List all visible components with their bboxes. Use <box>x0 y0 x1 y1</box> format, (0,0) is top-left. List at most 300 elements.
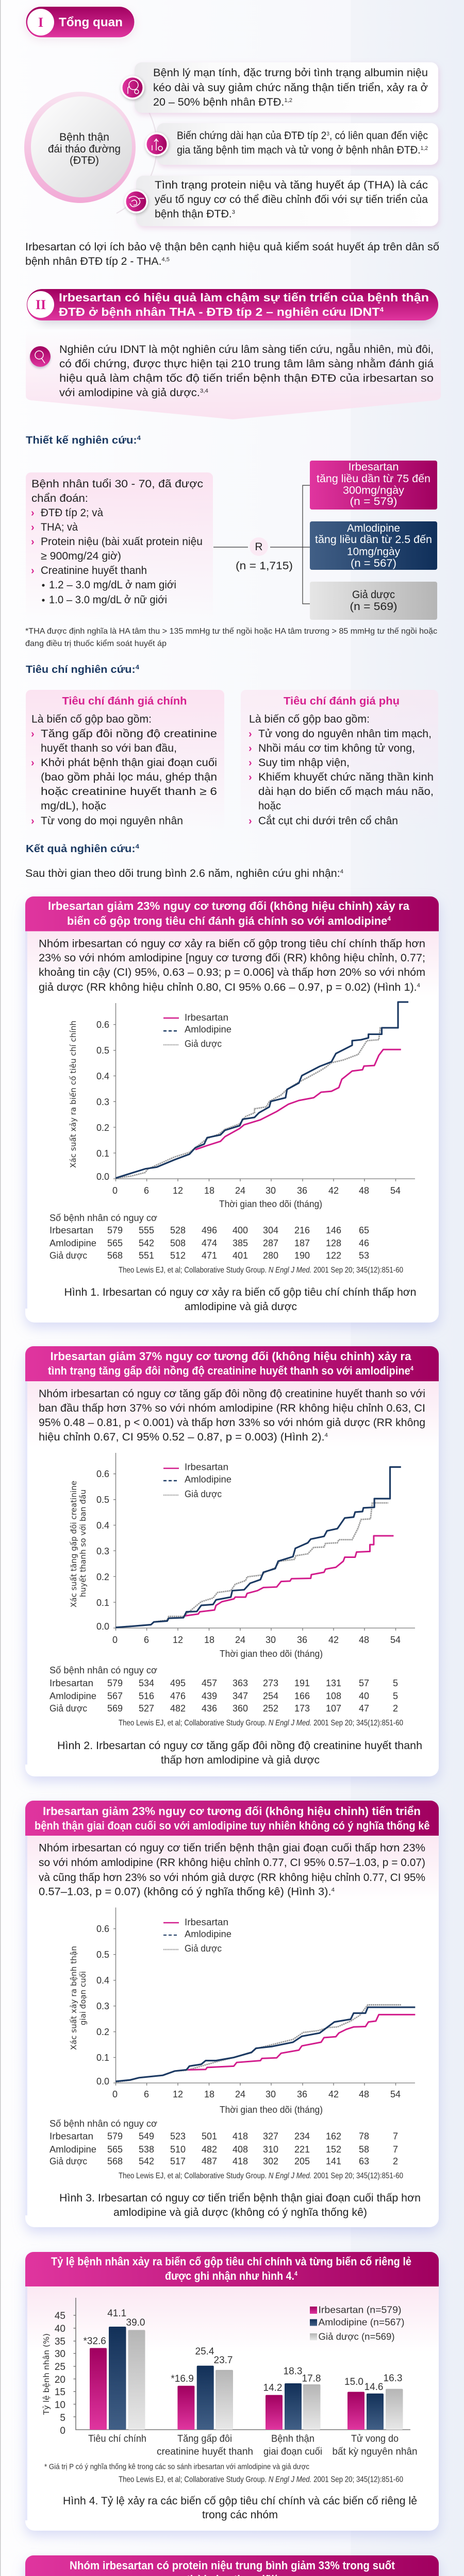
figure caption <box>64 1286 416 1313</box>
chart: end-stage renal disease: 54 <box>390 2089 401 2099</box>
risk table: Giả dược <box>49 1250 87 1261</box>
card 3: yếu tố nguy cơ có thể điều chỉnh đối với sự tiến triển của <box>155 194 428 206</box>
card 3 <box>136 176 438 226</box>
panel: IDNT description: hiệu quả làm chậm tốc độ tiến triển bệnh thận ĐTĐ của irbesartan so <box>59 372 434 384</box>
risk table: 487 <box>202 2156 217 2166</box>
panel: primary endpoint: (bao gồm phải lọc máu, ghép thận <box>41 771 217 783</box>
chart: doubling of serum creatinine: huyết thanh so với ban đầu <box>78 1489 88 1597</box>
chart: doubling of serum creatinine: 12 <box>173 1635 183 1645</box>
chart: doubling of serum creatinine: 24 <box>235 1635 245 1645</box>
legend <box>310 2305 404 2342</box>
risk table: 347 <box>233 1691 248 1701</box>
arm: amlodipine: 10mg/ngày <box>347 546 400 557</box>
group: doubling creatinine <box>157 2346 253 2458</box>
legend <box>163 1012 231 1049</box>
chart: doubling of serum creatinine: 0.0 <box>96 1621 109 1632</box>
risk table: Amlodipine <box>49 1238 96 1248</box>
chart: cumulative primary endpoint: 36 <box>297 1185 307 1196</box>
risk table: 205 <box>294 2156 310 2166</box>
panel: primary endpoint: Là biến cố gộp bao gồm: <box>31 713 152 725</box>
heading: study results: 4 <box>136 843 139 850</box>
risk table: Giả dược <box>49 2156 87 2166</box>
risk table <box>49 1213 369 1261</box>
panel: inclusion criteria: THA; và <box>41 521 78 533</box>
chart: end-stage renal disease: 42 <box>328 2089 339 2099</box>
panel: primary endpoint: Tiêu chí đánh giá chính <box>62 696 187 707</box>
chart: doubling of serum creatinine: 0.3 <box>96 1546 109 1556</box>
risk table: 78 <box>359 2131 369 2141</box>
panel: figure 5 proteinuria <box>25 2555 439 2576</box>
figure caption <box>57 1740 422 1766</box>
risk table: 517 <box>170 2156 186 2166</box>
chart: end-stage renal disease: 36 <box>297 2089 307 2099</box>
icon: kidney <box>124 190 148 213</box>
risk table: 310 <box>263 2144 278 2155</box>
bar chart: 20 <box>55 2375 65 2385</box>
risk table: 510 <box>170 2144 186 2155</box>
risk table: Amlodipine <box>49 1691 96 1701</box>
panel: primary endpoint: › <box>31 757 35 769</box>
panel: IDNT description: 3,4 <box>200 388 208 394</box>
card 3: bệnh thận ĐTĐ. <box>155 208 231 220</box>
chart: end-stage renal disease: 30 <box>266 2089 276 2099</box>
risk table: 46 <box>359 1238 369 1248</box>
risk table: 568 <box>107 1250 123 1261</box>
header: Tỷ lệ bệnh nhân xảy ra biến cố gộp tiêu chí chính và từng biến cố riêng lẻ <box>51 2255 411 2268</box>
risk table: 542 <box>139 1238 154 1248</box>
chart: cumulative primary endpoint: 0.0 <box>96 1172 109 1182</box>
chart: doubling of serum creatinine: 0 <box>112 1635 118 1645</box>
body text: 23% so với nhóm amlodipine [nguy cơ tương đối (RR) không hiệu chỉnh, 0.77; <box>39 952 425 964</box>
panel: primary endpoint: › <box>31 728 35 740</box>
panel: secondary endpoint: Nhồi máu cơ tim không tử vong, <box>258 742 415 754</box>
text: irbesartan renal benefit: 4,5 <box>162 257 170 263</box>
figure caption: Hình 2. Irbesartan có nguy cơ tăng gấp đôi nồng độ creatinine huyết thanh <box>57 1740 422 1752</box>
risk table: 363 <box>233 1678 248 1688</box>
body text: Nhóm irbesartan có nguy cơ xảy ra biến cố gộp trong tiêu chí chính thấp hơn <box>39 938 425 950</box>
panel: secondary endpoint: Khiếm khuyết chức năng thần kinh <box>258 771 434 783</box>
heading: section II <box>27 289 438 324</box>
risk table: 40 <box>359 1691 369 1701</box>
risk table: 47 <box>359 1703 369 1714</box>
risk table: 216 <box>294 1225 310 1235</box>
randomisation connector: R <box>255 541 263 553</box>
risk table: Số bệnh nhân có nguy cơ <box>49 1665 157 1675</box>
risk table: 128 <box>326 1238 341 1248</box>
chart: cumulative primary endpoint: 0.2 <box>96 1123 109 1133</box>
risk table: 191 <box>294 1678 310 1688</box>
randomisation connector: (n = 1,715) <box>236 560 293 572</box>
risk table: 166 <box>294 1691 310 1701</box>
legend: Giả dược <box>185 1039 222 1049</box>
citation: Theo Lewis EJ, et al; Collaborative Study Group. N Engl J Med. 2001 Sep 20; 345(12):851-60 <box>119 1266 403 1275</box>
arm: irbesartan <box>310 461 437 510</box>
chart: end-stage renal disease: 0 <box>112 2089 118 2099</box>
chart: cumulative primary endpoint: 0.3 <box>96 1097 109 1107</box>
risk table: 528 <box>170 1225 186 1235</box>
legend: Irbesartan <box>185 1462 228 1472</box>
chart: end-stage renal disease: 0.4 <box>96 1975 109 1986</box>
risk table: 527 <box>139 1703 154 1714</box>
arm: placebo: (n = 569) <box>350 601 397 613</box>
panel: secondary endpoint: Suy tim nhập viện, <box>258 757 350 769</box>
figure caption <box>63 2495 417 2521</box>
body text: khoảng tin cậy (CI) 95%, 0.63 – 0.93; p = 0.006] và thấp hơn 20% so với nhóm <box>39 967 425 978</box>
body text <box>39 1388 425 1443</box>
bar chart: 30 <box>55 2349 65 2360</box>
body text: 0.57–1.03, p = 0.07) (không có ý nghĩa thống kê) (Hình 3). <box>39 1886 318 1898</box>
chart: end-stage renal disease: 6 <box>144 2089 149 2099</box>
risk table: Amlodipine <box>49 2144 96 2155</box>
chart: cumulative primary endpoint: 6 <box>144 1185 149 1196</box>
heading: section II: II <box>36 297 46 312</box>
card 3: Tình trạng protein niệu và tăng huyết áp (THA) là các <box>155 179 428 191</box>
heading: section I <box>26 6 135 39</box>
panel: inclusion criteria: ĐTĐ típ 2; và <box>41 507 103 519</box>
header: 4 <box>410 1365 413 1372</box>
panel: figure 2 doubling of creatinine <box>25 1346 439 1776</box>
arm: irbesartan: (n = 579) <box>350 496 397 507</box>
chart: doubling of serum creatinine <box>69 1453 415 1659</box>
risk table: 146 <box>326 1225 341 1235</box>
panel: inclusion criteria: Creatinine huyết thanh <box>41 565 147 577</box>
legend: Irbesartan <box>185 1012 228 1023</box>
group: end-stage renal disease: 14.2 <box>263 2382 282 2394</box>
chart: cumulative primary endpoint: 0.6 <box>96 1020 109 1030</box>
risk table <box>49 2119 398 2166</box>
legend <box>163 1462 231 1499</box>
chart: doubling of serum creatinine: 0.2 <box>96 1572 109 1582</box>
group: end-stage renal disease: giai đoạn cuối <box>263 2446 322 2458</box>
legend: Irbesartan <box>185 1917 228 1927</box>
header <box>25 896 439 931</box>
chart: cumulative primary endpoint: 30 <box>266 1185 276 1196</box>
diagram: overview of diabetic kidney disease <box>24 62 438 226</box>
risk table: Số bệnh nhân có nguy cơ <box>49 1213 157 1223</box>
body text: so với nhóm amlodipine (RR không hiệu chỉnh 0.77, CI 95% 0.57–1.03, p = 0.07) <box>39 1857 425 1869</box>
chart: end-stage renal disease: 0.3 <box>96 2001 109 2011</box>
risk table: 565 <box>107 2144 123 2155</box>
central circle: Bệnh thận <box>59 131 109 143</box>
panel: secondary endpoint: hoặc <box>258 800 281 812</box>
chart: doubling of serum creatinine: 0.6 <box>96 1469 109 1479</box>
risk table: 152 <box>326 2144 341 2155</box>
central circle <box>24 92 136 203</box>
heading: study design: Thiết kế nghiên cứu: <box>26 435 127 446</box>
group: all-cause death <box>332 2373 418 2458</box>
chart: doubling of serum creatinine: Xác suất tăng gấp đôi creatinine <box>69 1481 78 1607</box>
risk table: 5 <box>393 1678 398 1688</box>
risk table: 327 <box>263 2131 278 2141</box>
panel: secondary endpoint: Là biến cố gộp bao gồm: <box>249 713 370 725</box>
risk table: 7 <box>393 2144 398 2155</box>
risk table: 63 <box>359 2156 369 2166</box>
bar chart: 5 <box>60 2413 65 2424</box>
bar chart: 15 <box>55 2387 65 2398</box>
risk table: 495 <box>170 1678 186 1688</box>
legend: Irbesartan (n=579) <box>319 2305 401 2315</box>
randomisation connector <box>213 485 310 604</box>
figure caption: Hình 4. Tỷ lệ xảy ra các biến cố gộp tiêu chí chính và các biến cố riêng lẻ <box>63 2495 417 2507</box>
group: primary endpoint: *32.6 <box>84 2336 106 2347</box>
chart: doubling of serum creatinine: 18 <box>204 1635 214 1645</box>
panel: primary endpoint: hoặc creatinine huyết thanh ≥ 6 <box>41 786 217 798</box>
panel: inclusion criteria <box>26 472 213 619</box>
card 1 <box>135 62 438 113</box>
text: follow-up: Sau thời gian theo dõi trung bình 2.6 năm, nghiên cứu ghi nhận: <box>25 868 333 879</box>
risk table: Giả dược <box>49 1703 87 1714</box>
chart: end-stage renal disease: 0.0 <box>96 2076 109 2087</box>
panel: inclusion criteria: › <box>31 507 35 519</box>
chart: doubling of serum creatinine: 42 <box>328 1635 339 1645</box>
card 2: , có liên quan đến việc <box>329 130 428 142</box>
risk table: 534 <box>139 1678 154 1688</box>
panel: secondary endpoint <box>241 690 438 831</box>
group: all-cause death: 16.3 <box>384 2373 402 2384</box>
chart: doubling of serum creatinine: 48 <box>359 1635 369 1645</box>
card 2: gia tăng bệnh tim mạch và tử vong ở bệnh nhân ĐTĐ. <box>177 144 436 156</box>
risk table: 436 <box>202 1703 217 1714</box>
body text: Nhóm irbesartan có nguy cơ tăng gấp đôi nồng độ creatinine huyết thanh so với <box>39 1388 425 1400</box>
chart: doubling of serum creatinine: 36 <box>297 1635 307 1645</box>
risk table: 551 <box>139 1250 154 1261</box>
header: Nhóm irbesartan có protein niệu trung bình giảm 33% trong suốt <box>70 2559 395 2572</box>
risk table: 408 <box>233 2144 248 2155</box>
heading: section II: Irbesartan có hiệu quả làm chậm sự tiến triển của bệnh thận <box>59 291 429 304</box>
heading: section I: I <box>38 15 43 30</box>
chart: doubling of serum creatinine: 0.5 <box>96 1495 109 1505</box>
chart: cumulative primary endpoint: 0.4 <box>96 1071 109 1081</box>
risk table: 273 <box>263 1678 278 1688</box>
panel: primary endpoint: Tăng gấp đôi nồng độ creatinine <box>41 728 217 740</box>
card 2: 1,2 <box>421 145 428 151</box>
risk table: 567 <box>107 1691 123 1701</box>
risk table: 58 <box>359 2144 369 2155</box>
risk table: 287 <box>263 1238 278 1248</box>
risk table <box>49 1665 398 1714</box>
citation: Theo Lewis EJ, et al; Collaborative Study Group. N Engl J Med. 2001 Sep 20; 345(12):851-60 <box>119 2475 403 2484</box>
heading: study criteria: Tiêu chí nghiên cứu: <box>26 664 127 675</box>
panel: IDNT description <box>26 330 441 419</box>
citation: Theo Lewis EJ, et al; Collaborative Study Group. N Engl J Med. 2001 Sep 20; 345(12):851-60 <box>119 2172 403 2180</box>
legend: Amlodipine <box>185 1475 231 1485</box>
chart: doubling of serum creatinine: 30 <box>266 1635 276 1645</box>
chart: cumulative primary endpoint <box>69 1002 415 1209</box>
panel: figure 3 end-stage renal disease <box>25 1801 439 2227</box>
group: doubling creatinine: 23.7 <box>214 2355 233 2366</box>
arm: irbesartan: 300mg/ngày <box>343 484 405 497</box>
group: end-stage renal disease <box>263 2366 322 2458</box>
card 2 <box>157 123 438 165</box>
body text: 95% 0.48 – 0.81, p < 0.001) và thấp hơn 33% so với nhóm giả dược (RR không <box>39 1417 425 1429</box>
body text <box>39 938 425 993</box>
body text: 4 <box>332 1887 335 1893</box>
risk table: 496 <box>202 1225 217 1235</box>
chart: doubling of serum creatinine: 6 <box>144 1635 149 1645</box>
group: all-cause death: bất kỳ nguyên nhân <box>332 2446 418 2458</box>
chart: end-stage renal disease: 0.2 <box>96 2027 109 2037</box>
risk table: Irbesartan <box>49 2131 93 2141</box>
risk table: 5 <box>393 1691 398 1701</box>
chart: end-stage renal disease: giai đoạn cuối <box>78 1971 88 2025</box>
risk table: 57 <box>359 1678 369 1688</box>
panel: secondary endpoint: › <box>248 816 252 827</box>
bar chart: 10 <box>55 2400 65 2411</box>
risk table: 508 <box>170 1238 186 1248</box>
panel: secondary endpoint: › <box>248 772 252 783</box>
group: doubling creatinine: Tăng gấp đôi <box>177 2434 232 2444</box>
legend: Giả dược <box>185 1943 222 1954</box>
body text: 4 <box>325 1432 328 1438</box>
group: primary endpoint: 39.0 <box>126 2317 145 2328</box>
risk table: 542 <box>139 2156 154 2166</box>
arm: amlodipine: (n = 567) <box>351 557 396 569</box>
panel: primary endpoint: Khởi phát bệnh thận giai đoạn cuối <box>41 757 217 769</box>
risk table: 400 <box>233 1225 248 1235</box>
risk table: 252 <box>263 1703 278 1714</box>
risk table: 569 <box>107 1703 123 1714</box>
risk table: Irbesartan <box>49 1678 93 1688</box>
panel: IDNT description: có đối chứng, được thực hiện tại 210 trung tâm lâm sàng nhằm đánh giá <box>59 358 434 370</box>
figure caption <box>59 2192 421 2218</box>
bar chart: 45 <box>55 2311 65 2321</box>
bar chart: 35 <box>55 2336 65 2347</box>
panel: primary endpoint <box>26 690 224 831</box>
risk table: 501 <box>202 2131 217 2141</box>
card 2: 3 <box>326 131 329 137</box>
arm: amlodipine: Amlodipine <box>347 522 400 534</box>
chart: cumulative primary endpoint: 0.1 <box>96 1148 109 1159</box>
central circle: đái tháo đường <box>48 143 121 155</box>
chart: cumulative primary endpoint: 54 <box>390 1185 401 1196</box>
risk table: 302 <box>263 2156 278 2166</box>
risk table: 474 <box>202 1238 217 1248</box>
figure caption: trong các nhóm <box>202 2509 278 2521</box>
panel: inclusion criteria: Protein niệu (bài xuất protein niệu <box>41 536 203 548</box>
heading: study results: Kết quả nghiên cứu: <box>26 843 126 855</box>
bar chart: Tỷ lệ bệnh nhân (%) <box>42 2333 51 2415</box>
header: Irbesartan giảm 37% nguy cơ tương đối (không hiệu chỉnh) xảy ra <box>51 1350 411 1363</box>
header: được ghi nhận như hình 4. <box>165 2269 310 2282</box>
arm: amlodipine: tăng liều dần từ 2.5 đến <box>315 534 432 546</box>
panel: inclusion criteria: › <box>31 565 35 577</box>
chart: end-stage renal disease: Thời gian theo dõi (tháng) <box>220 2105 323 2115</box>
icon: magnifier <box>30 346 51 367</box>
chart: doubling of serum creatinine: 54 <box>390 1635 401 1645</box>
text: irbesartan renal benefit: Irbesartan có lợi ích bảo vệ thận bên cạnh hiệu quả kiểm soát huyết áp trên dân số <box>25 241 439 253</box>
body text: ban đầu thấp hơn 37% so với nhóm amlodipine (RR không hiệu chỉnh 0.63, CI <box>39 1402 425 1414</box>
footnote: hypertension definition: *THA được định nghĩa là HA tâm thu > 135 mmHg tư thế ngồi hoặc HA tâm trương > 85 mmHg tư thế ngồi hoặc <box>25 627 437 636</box>
footnote: * Giá trị P có ý nghĩa thống kê trong các so sánh irbesartan với amlodipine và giả dược <box>44 2463 309 2471</box>
risk table: 108 <box>326 1691 341 1701</box>
legend <box>163 1917 231 1954</box>
panel: figure 1 primary composite <box>25 896 439 1323</box>
chart: end-stage renal disease: Xác suất xảy ra bệnh thận <box>69 1946 78 2050</box>
risk table: 2 <box>393 2156 398 2166</box>
text: irbesartan renal benefit: bệnh nhân ĐTĐ típ 2 - THA. <box>25 256 160 267</box>
risk table: 162 <box>326 2131 341 2141</box>
chart: cumulative primary endpoint: 0.5 <box>96 1045 109 1056</box>
arc connector <box>117 90 157 213</box>
risk table: 7 <box>393 2131 398 2141</box>
risk table: 568 <box>107 2156 123 2166</box>
risk table: 107 <box>326 1703 341 1714</box>
group: all-cause death: 14.6 <box>364 2382 383 2393</box>
risk table: 401 <box>233 1250 248 1261</box>
panel: inclusion criteria: › <box>31 522 35 533</box>
panel: figure 4 event rates <box>25 2252 439 2531</box>
panel: secondary endpoint: › <box>248 728 252 740</box>
panel: inclusion criteria: 1.0 – 3.0 mg/dL ở nữ giới <box>49 594 167 606</box>
arm: amlodipine <box>310 521 437 570</box>
panel: inclusion criteria: chẩn đoán: <box>31 493 88 504</box>
panel: secondary endpoint: › <box>248 757 252 769</box>
risk table: 131 <box>326 1678 341 1688</box>
chart: cumulative primary endpoint: Xác suất xảy ra biến cố tiêu chí chính <box>69 1021 78 1168</box>
risk table: 234 <box>294 2131 310 2141</box>
risk table: 2 <box>393 1703 398 1714</box>
risk table: 523 <box>170 2131 186 2141</box>
risk table: 65 <box>359 1225 369 1235</box>
header: Irbesartan giảm 23% nguy cơ tương đối (không hiệu chỉnh) xảy ra <box>48 900 410 912</box>
risk table: 476 <box>170 1691 186 1701</box>
text: follow-up: 4 <box>340 869 343 875</box>
group: all-cause death: Tử vong do <box>351 2434 399 2444</box>
group: all-cause death: 15.0 <box>344 2377 363 2387</box>
panel: inclusion criteria: 1.2 – 3.0 mg/dL ở nam giới <box>49 579 176 591</box>
legend: Amlodipine (n=567) <box>319 2317 404 2328</box>
legend: Amlodipine <box>185 1024 231 1035</box>
chart: cumulative primary endpoint: 0 <box>112 1185 118 1196</box>
bar chart: 0 <box>60 2426 65 2436</box>
icon: rising chart <box>145 132 169 156</box>
risk table: 439 <box>202 1691 217 1701</box>
card 1: Bệnh lý mạn tính, đặc trưng bởi tình trạng albumin niệu <box>153 67 428 79</box>
body text: và cũng thấp hơn 23% so với nhóm giả dược (RR không hiệu chỉnh 0.77, CI 95% <box>39 1872 425 1884</box>
group: primary endpoint <box>84 2308 146 2444</box>
chart: end-stage renal disease: 0.5 <box>96 1950 109 1960</box>
footnote: hypertension definition: đang điều trị thuốc kiểm soát huyết áp <box>25 639 167 648</box>
risk table: 516 <box>139 1691 154 1701</box>
group: end-stage renal disease: Bệnh thận <box>271 2434 314 2444</box>
legend: Amlodipine <box>185 1929 231 1939</box>
bar chart: 40 <box>55 2324 65 2334</box>
risk table: 221 <box>294 2144 310 2155</box>
text: irbesartan renal benefit <box>25 241 439 267</box>
body text: 4 <box>417 982 420 989</box>
group: doubling creatinine: 25.4 <box>195 2346 214 2357</box>
header <box>25 1346 439 1381</box>
icon: kidney cells <box>121 76 144 99</box>
figure caption: Hình 1. Irbesartan có nguy cơ xảy ra biến cố gộp tiêu chí chính thấp hơn <box>64 1286 416 1298</box>
header: 4 <box>387 915 391 922</box>
panel: primary endpoint: › <box>31 816 35 827</box>
card 1: kéo dài và suy giảm chức năng thận tiến triển, xảy ra ở <box>153 82 428 94</box>
risk table: 579 <box>107 2131 123 2141</box>
risk table: 304 <box>263 1225 278 1235</box>
group: end-stage renal disease: 17.8 <box>302 2373 321 2384</box>
panel: IDNT description: với amlodipine và giả dược. <box>59 387 193 399</box>
panel: secondary endpoint: Cắt cụt chi dưới trên cổ chân <box>258 815 398 827</box>
group: doubling creatinine: *16.9 <box>171 2374 194 2384</box>
heading: section II: ĐTĐ ở bệnh nhân THA - ĐTĐ típ 2 – nghiên cứu IDNT <box>59 306 344 318</box>
header: 4 <box>294 2270 297 2277</box>
body text: Nhóm irbesartan có nguy cơ tiến triển bệnh thận giai đoạn cuối thấp hơn 23% <box>39 1842 425 1854</box>
bar chart <box>42 2298 418 2458</box>
risk table: 457 <box>202 1678 217 1688</box>
risk table: 549 <box>139 2131 154 2141</box>
chart: cumulative primary endpoint: 12 <box>173 1185 183 1196</box>
